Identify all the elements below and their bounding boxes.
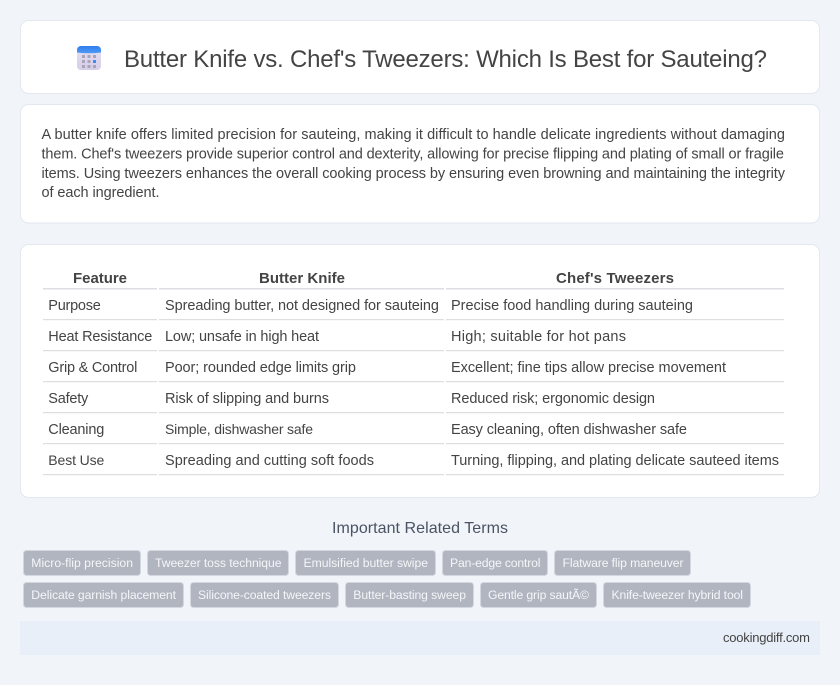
tags: related terms bbox=[24, 550, 750, 608]
panel: title card bbox=[20, 20, 820, 94]
tag: Pan-edge control bbox=[450, 556, 540, 570]
row: safety bbox=[43, 391, 784, 413]
row: cleaning bbox=[43, 421, 784, 444]
panel: comparison table bbox=[20, 244, 820, 498]
row: best use: Turning, flipping, and plating delicate sauteed items bbox=[451, 453, 779, 469]
row: purpose: Precise food handling during sauteing bbox=[451, 298, 693, 314]
row: best use: Best Use bbox=[48, 452, 105, 468]
row: grip and control bbox=[43, 360, 784, 382]
row: grip and control: Excellent; fine tips allow precise movement bbox=[451, 360, 726, 376]
intro text: A butter knife offers limited precision for sauteing, making it difficult to handle delicate ingredients without damaging bbox=[42, 127, 785, 143]
tag: Knife-tweezer hybrid tool bbox=[612, 588, 743, 602]
tag: Tweezer toss technique bbox=[155, 556, 282, 570]
tag: Emulsified butter swipe bbox=[304, 556, 428, 570]
tag: Gentle grip sautÃ© bbox=[488, 588, 589, 602]
row: grip and control: Poor; rounded edge limits grip bbox=[165, 360, 356, 376]
table header bbox=[43, 270, 784, 290]
row: heat resistance: Low; unsafe in high heat bbox=[165, 329, 319, 345]
tag: Micro-flip precision bbox=[31, 556, 133, 570]
row: purpose: Spreading butter, not designed for sauteing bbox=[165, 298, 439, 314]
tag bbox=[604, 582, 750, 608]
intro text bbox=[42, 127, 786, 201]
row: safety: Safety bbox=[48, 391, 89, 407]
tag bbox=[480, 582, 596, 608]
tag bbox=[442, 550, 548, 576]
row: purpose: Purpose bbox=[48, 298, 101, 314]
footer source: cookingdiff.com bbox=[723, 630, 810, 645]
row: grip and control: Grip & Control bbox=[48, 360, 137, 376]
panel: intro paragraph bbox=[20, 104, 820, 223]
intro text: of each ingredient. bbox=[42, 185, 160, 201]
tag bbox=[24, 582, 184, 608]
title: Butter Knife vs. Chef's Tweezers: Which Is Best for Sauteing? bbox=[124, 46, 767, 73]
heading: related terms: Important Related Terms bbox=[332, 520, 508, 537]
tag bbox=[346, 582, 474, 608]
row: heat resistance: High; suitable for hot pans bbox=[451, 329, 626, 345]
intro text: them. Chef's tweezers provide superior control and dexterity, allowing for precise flipping and plating of small or fragile bbox=[42, 146, 784, 162]
row: cleaning: Easy cleaning, often dishwasher safe bbox=[451, 422, 687, 438]
tag bbox=[148, 550, 288, 576]
tag bbox=[296, 550, 436, 576]
row: heat resistance: Heat Resistance bbox=[48, 329, 152, 345]
table header: Butter Knife bbox=[259, 270, 345, 287]
row: heat resistance bbox=[43, 329, 784, 351]
intro text: items. Using tweezers enhances the overall cooking process by ensuring even browning and maintaining the integrity bbox=[42, 166, 786, 182]
tag: Flatware flip maneuver bbox=[562, 556, 684, 570]
tag bbox=[24, 550, 140, 576]
tag: Butter-basting sweep bbox=[353, 588, 466, 602]
row: safety: Risk of slipping and burns bbox=[165, 391, 329, 407]
tag bbox=[554, 550, 690, 576]
row: purpose bbox=[43, 298, 784, 320]
icon: calendar bbox=[77, 46, 101, 70]
row: best use bbox=[43, 452, 784, 475]
footer bbox=[20, 621, 820, 655]
table header: Chef's Tweezers bbox=[556, 270, 674, 287]
row: best use: Spreading and cutting soft foods bbox=[165, 453, 374, 469]
tag: Delicate garnish placement bbox=[31, 588, 177, 602]
tag bbox=[190, 582, 338, 608]
row: cleaning: Simple, dishwasher safe bbox=[165, 421, 313, 437]
row: cleaning: Cleaning bbox=[48, 422, 104, 438]
tag: Silicone-coated tweezers bbox=[198, 588, 331, 602]
table header: Feature bbox=[73, 270, 127, 287]
row: safety: Reduced risk; ergonomic design bbox=[451, 391, 655, 407]
